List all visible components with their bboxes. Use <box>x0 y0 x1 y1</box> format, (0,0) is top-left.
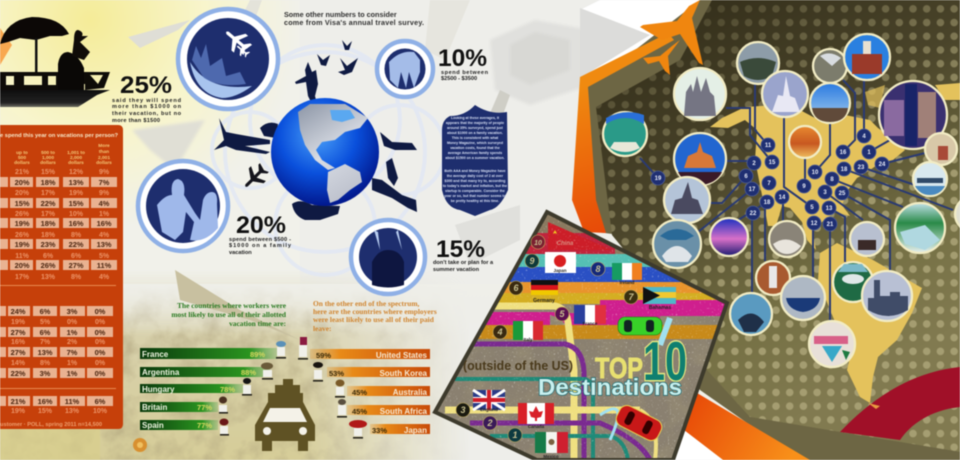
flag: japan: Japan <box>553 268 567 273</box>
table rows bottom: 19% <box>11 408 26 415</box>
table rows upper: 8% <box>71 274 82 281</box>
flag: united kingdom <box>473 390 505 412</box>
bar chart: least vacation used: Australia <box>393 388 428 397</box>
column headers: dollars <box>40 160 56 166</box>
photo: beige arch <box>925 133 957 165</box>
number badges: 12 <box>811 221 818 227</box>
rank numbers: 8 <box>595 264 601 274</box>
rank numbers: 6 <box>513 283 519 293</box>
stat: 25%: more than $1500 <box>112 118 160 124</box>
stat: 15% <box>433 236 494 273</box>
table rows lower: 13% <box>38 348 53 357</box>
map: north and south america <box>710 83 960 409</box>
number badges <box>651 129 889 231</box>
silhouettes around globe <box>214 62 417 220</box>
stat: 20%: $1000 on a family <box>229 243 292 249</box>
table rows lower: 27% <box>11 348 26 357</box>
rank numbers: 10 <box>534 240 542 247</box>
stat: 20%: spend between $500 - <box>229 237 291 243</box>
table rows upper: 17% <box>41 211 56 218</box>
photo: harbour <box>810 83 850 123</box>
shield text panel: about $1500 on a summer vacation. <box>445 156 505 160</box>
table rows lower: 3% <box>67 307 78 316</box>
table rows lower: 24% <box>11 307 26 316</box>
table rows lower: 22% <box>11 369 26 378</box>
flag: mexico <box>535 432 568 459</box>
table rows upper: 9% <box>99 169 110 176</box>
table rows lower: 8% <box>40 360 51 367</box>
photo: white ship <box>913 162 947 196</box>
birds <box>317 40 358 75</box>
photo: purple bridge <box>710 218 748 256</box>
compass decoration on map <box>133 438 147 452</box>
table rows lower: 0% <box>95 307 106 316</box>
stat: 25%: their vacation, but no <box>112 111 182 117</box>
shield text panel: vacation costs, found that the <box>450 146 500 150</box>
table source note: ustomer · POLL, spring 2011 n=14,500 <box>0 422 102 428</box>
column headers: 2,001 <box>98 155 110 161</box>
table rows upper: 6% <box>43 253 54 260</box>
table rows upper: 26% <box>15 232 30 239</box>
number badges: 11 <box>765 143 772 149</box>
photo: blue fountain <box>653 220 701 268</box>
bar chart: least vacation used <box>310 349 430 435</box>
table rows lower: 19% <box>11 319 26 326</box>
photo: cropped edge <box>955 196 960 232</box>
rank numbers <box>456 235 638 442</box>
bar chart: least vacation used: Japan <box>404 426 427 435</box>
photo: temple <box>674 68 726 120</box>
flag: italy <box>513 321 543 342</box>
stat: 15%: 15% <box>436 236 485 263</box>
flag: germany: Germany <box>533 298 555 304</box>
table rows upper: 17% <box>41 190 56 197</box>
light row cells <box>0 177 117 406</box>
table rows upper: 1% <box>99 211 110 218</box>
red arc <box>840 367 960 440</box>
stat: 20% <box>229 212 292 256</box>
table rows upper: 13% <box>69 178 84 187</box>
shield text panel: the average daily cost of 2 at over <box>447 174 504 178</box>
table rows upper: 16% <box>97 219 112 228</box>
table rows upper: 23% <box>41 240 56 249</box>
orange route band <box>572 33 810 460</box>
column headers: 1,001 to <box>67 150 85 156</box>
number badges: 1 <box>867 150 871 156</box>
heading: least likely countries: On the other end of the spectrum, <box>313 299 420 308</box>
rank numbers: 4 <box>496 327 503 337</box>
table rows lower: 5% <box>40 319 51 326</box>
heading: least likely countries: here are the countries where employers <box>313 307 437 316</box>
table rows lower: 27% <box>11 328 26 337</box>
column headers: dollars <box>68 160 84 166</box>
table rows lower: 14% <box>11 360 26 367</box>
shield text panel: Money Magazine, which surveyed <box>447 141 503 145</box>
table title: e spend this year on vacations per person? <box>0 133 118 139</box>
shield text panel: average American family spends <box>448 151 502 155</box>
faint route rings <box>212 45 445 275</box>
table rows upper: 16% <box>69 219 84 228</box>
photo: orange palace <box>674 133 726 185</box>
illustration: globe with silhouettes <box>214 40 417 220</box>
table rows lower: 7% <box>67 348 78 357</box>
number badges: 7 <box>767 181 771 187</box>
flag: germany <box>531 280 558 304</box>
number badges: 17 <box>749 187 756 193</box>
table rows lower: 16% <box>11 339 26 346</box>
title: top 10 destinations: Destinations <box>538 374 682 400</box>
panel: spending table <box>0 125 123 429</box>
bar chart: least vacation used: 53% <box>329 369 344 378</box>
table rows bottom: 6% <box>95 397 106 406</box>
heading: least likely countries: were least likely to use all of their paid <box>313 315 435 324</box>
flag: china <box>553 230 574 247</box>
column headers: 500 <box>18 155 26 161</box>
flag: canada <box>518 403 554 429</box>
table rows upper: 13% <box>41 274 56 281</box>
table rows lower: 1% <box>67 369 78 378</box>
table rows lower: 1% <box>67 360 78 367</box>
rank numbers: 7 <box>628 292 634 302</box>
number badges: 25 <box>839 191 846 197</box>
photo: canyon <box>756 261 790 295</box>
rank numbers: 5 <box>559 309 565 319</box>
background <box>0 0 464 460</box>
table rows bottom: 10% <box>93 408 108 415</box>
heading: most likely countries: most likely to use all of their allotted <box>171 310 287 319</box>
bar chart: most vacation used: 78% <box>220 385 235 394</box>
column headers: dollars <box>96 160 112 166</box>
shield text panel <box>442 105 508 216</box>
icon: green car <box>618 317 662 335</box>
table rows upper: 26% <box>41 261 56 270</box>
flag: bahamas: Bahamas <box>649 305 671 311</box>
bar chart: least vacation used: 59% <box>316 351 331 360</box>
number badges: 15 <box>769 160 776 166</box>
intro text: Some other numbers to consider <box>284 10 397 19</box>
shield text panel: Both AAA and Money Magazine have <box>444 169 506 173</box>
table rows lower: 2% <box>67 339 78 346</box>
stat: 15%: summer vacation <box>433 267 480 273</box>
number badges: 14 <box>779 195 786 201</box>
icon: taxi <box>255 379 315 451</box>
table rows upper: 19% <box>69 190 84 197</box>
flag: china: China <box>557 241 574 247</box>
flag: ireland: Ireland <box>620 280 635 285</box>
table rows upper: 19% <box>15 240 30 249</box>
table rows lower: 0% <box>95 328 106 337</box>
flag: france: France <box>583 321 598 326</box>
table rows upper: 8% <box>71 232 82 239</box>
table rows lower: 0% <box>95 360 106 367</box>
stat: 10%: 10% <box>438 45 487 72</box>
number badges: 18 <box>841 167 848 173</box>
bar chart: least vacation used: 45% <box>352 407 367 416</box>
flag: japan <box>545 252 576 273</box>
table rows upper: 20% <box>15 261 30 270</box>
bar chart: least vacation used: South Africa <box>380 407 428 416</box>
bar chart: most vacation used: 88% <box>241 368 256 377</box>
icon: black plane <box>238 160 272 194</box>
card subtitle: (outside of the US) <box>463 358 573 373</box>
photo: tropical pool <box>603 112 647 156</box>
stat: 10%: $2500 - $3500 <box>441 76 477 82</box>
bar chart: most vacation used: Spain <box>142 421 164 430</box>
stat: 10%: spend between <box>441 70 489 76</box>
number badges: 21 <box>827 222 834 228</box>
table rows upper: 20% <box>15 190 30 197</box>
table rows lower: 6% <box>40 328 51 337</box>
stat: 25%: said they will spend <box>112 98 182 104</box>
flag: canada: Canada <box>528 424 545 429</box>
number badges: 4 <box>862 134 866 140</box>
flag: bahamas <box>643 287 676 311</box>
table rows bottom <box>11 397 108 415</box>
number badges: 24 <box>879 162 886 168</box>
stat: 20%: vacation <box>229 250 252 256</box>
circle: 15% silhouette <box>351 220 425 294</box>
shield text panel: year or so, but that number seems to <box>444 194 506 198</box>
bar chart: most vacation used: Argentina <box>142 368 180 377</box>
bar chart: most vacation used: Hungary <box>142 385 175 394</box>
photo: skyline <box>862 271 912 321</box>
stat: 25% <box>112 72 182 124</box>
rank numbers: 1 <box>512 430 518 440</box>
shield text panel: around 35% surveyed, spend just <box>447 126 504 130</box>
number badges: 5 <box>810 205 814 211</box>
shield text panel: This is consistent with what <box>452 136 499 140</box>
title: top 10 destinations <box>538 330 687 400</box>
bar chart: most vacation used: Britain <box>142 403 167 412</box>
photo: grey waterfall <box>769 221 805 257</box>
flag: france <box>574 305 606 326</box>
photo: green falls <box>895 203 945 253</box>
table rows upper: 27% <box>69 261 84 270</box>
photo: white castle <box>762 71 808 117</box>
photo: grey street <box>813 49 847 83</box>
number badges: 22 <box>750 211 757 217</box>
table rows upper: 15% <box>15 199 30 208</box>
stat: 25%: 25% <box>120 72 172 99</box>
photo: green stadium <box>833 262 873 302</box>
number badges: 8 <box>830 177 834 183</box>
heading: least likely countries: leave: <box>313 324 331 333</box>
column headers: 1,000 <box>42 155 54 161</box>
photo: dusk fortress <box>850 222 884 256</box>
table rows upper: 4% <box>99 232 110 239</box>
table rows bottom: 21% <box>11 397 26 406</box>
table rows upper: 7% <box>99 178 110 187</box>
shield text panel: startup is comparable. Consider the <box>445 189 505 193</box>
stat: 15%: don't take or plan for a <box>433 260 494 266</box>
stat: 10% <box>438 45 489 82</box>
table rows upper: 4% <box>99 274 110 281</box>
title: top 10 destinations: TOP <box>595 353 643 385</box>
bar chart: most vacation used: 89% <box>250 350 265 359</box>
photo: pink carnival <box>809 321 855 367</box>
table rows lower: 7% <box>40 339 51 346</box>
column headers: dollars <box>14 160 30 166</box>
table rows lower: 6% <box>40 307 51 316</box>
number badges: 2 <box>752 161 756 167</box>
column headers: More <box>98 143 110 149</box>
table rows upper: 21% <box>15 169 30 176</box>
table rows upper: 22% <box>41 199 56 208</box>
table rows lower: 1% <box>67 328 78 337</box>
icon: orange plane <box>640 0 703 75</box>
flag: italy: Italy <box>523 337 533 342</box>
photo: fairy castle <box>664 177 710 223</box>
heading: most likely countries: vacation time are: <box>229 319 286 328</box>
route lines <box>640 80 953 320</box>
shield text panel: be pretty healthy at this time. <box>451 199 499 203</box>
table rows upper: 6% <box>71 253 82 260</box>
table rows upper: 13% <box>97 240 112 249</box>
number badges: 10 <box>812 170 819 176</box>
illustration: boat with umbrella silhouette <box>0 17 110 107</box>
bar chart: most vacation used: 77% <box>197 421 212 430</box>
photo: dolphins <box>730 293 772 335</box>
table rows upper: 18% <box>41 232 56 239</box>
table rows upper: 20% <box>15 178 30 187</box>
table rows upper: 22% <box>69 240 84 249</box>
table rows bottom: 16% <box>38 397 53 406</box>
table rows upper: 15% <box>41 169 56 176</box>
coloured road bands <box>444 215 725 459</box>
bar chart: most vacation used <box>140 348 277 430</box>
number badges: 19 <box>655 176 662 182</box>
bar chart: least vacation used: 45% <box>352 388 367 397</box>
table rows upper: 11% <box>15 253 30 260</box>
shield text panel: to today's market and inflation, but the <box>443 184 507 188</box>
table rows bottom: 15% <box>38 408 53 415</box>
column headers: 500 to <box>41 150 55 156</box>
column headers: up to <box>16 150 28 156</box>
panel: top 10 destinations card <box>430 205 730 460</box>
table rows lower: 0% <box>95 348 106 357</box>
table rows upper: 11% <box>97 261 112 270</box>
photo: red hall <box>844 34 890 80</box>
table rows upper: 12% <box>69 169 84 176</box>
table rows upper: 10% <box>69 211 84 218</box>
flag: mexico: Mexico <box>543 454 559 459</box>
intro text: come from Visa's annual travel survey. <box>284 18 424 27</box>
bar chart: most vacation used: 77% <box>197 403 212 412</box>
table rows bottom: 11% <box>65 397 80 406</box>
shield text panel: $300 and that many try to, according <box>445 179 505 183</box>
table rows upper: 18% <box>41 178 56 187</box>
column headers: than <box>99 149 109 155</box>
table rows lower: 0% <box>67 319 78 326</box>
circle: 10% group <box>377 41 433 97</box>
shield text panel: about $1000 on a family vacation. <box>447 131 503 135</box>
photo: blue grey harbour <box>781 276 825 320</box>
bar chart: most vacation used: France <box>142 350 169 359</box>
number badges: 6 <box>744 174 748 180</box>
stat: 25%: more than $1000 on <box>112 104 182 110</box>
shield text panel: appears that the majority of people <box>446 121 504 125</box>
rank numbers: 3 <box>460 405 466 415</box>
rank numbers: 2 <box>486 418 493 428</box>
stat: 20%: 20% <box>236 212 286 239</box>
flag: united kingdom: England <box>480 407 498 412</box>
panel: right dark map panel <box>587 0 960 460</box>
heading: most likely countries: The countries where workers were <box>177 301 287 310</box>
flag: ireland <box>612 263 642 285</box>
number badges: 3 <box>823 190 827 196</box>
table rows lower: 0% <box>95 319 106 326</box>
table rows lower: 0% <box>95 339 106 346</box>
icon: red car <box>614 403 664 443</box>
table rows lower: 3% <box>40 369 51 378</box>
rank numbers: 9 <box>529 256 535 266</box>
photo: sunset <box>789 126 821 158</box>
table rows lower: 0% <box>95 369 106 378</box>
bar chart: least vacation used: South Korea <box>379 369 428 378</box>
number badges: 23 <box>858 165 865 171</box>
table rows upper: 18% <box>41 219 56 228</box>
table rows upper: 9% <box>99 190 110 197</box>
number badges: 16 <box>840 150 847 156</box>
table rows upper: 4% <box>99 199 110 208</box>
table rows bottom: 13% <box>65 408 80 415</box>
title: top 10 destinations: 10 <box>643 330 687 392</box>
table rows upper: 17% <box>15 274 30 281</box>
table rows lower <box>11 307 106 378</box>
table rows upper: 5% <box>99 253 110 260</box>
table rows upper: 26% <box>15 211 30 218</box>
number badges: 13 <box>826 206 833 212</box>
photo: times square <box>879 81 947 149</box>
number badges: 9 <box>802 184 806 190</box>
circle: plane and foliage <box>178 9 278 109</box>
table rows upper: 15% <box>69 199 84 208</box>
number badges: 18 <box>764 200 771 206</box>
shield text panel: Looking at these averages, it <box>451 116 500 120</box>
bar chart: least vacation used: United States <box>376 351 428 360</box>
column headers: 2,000 <box>70 155 82 161</box>
landmark photo circles <box>603 34 960 367</box>
table rows upper <box>15 169 112 281</box>
photo: river valley <box>737 42 779 84</box>
icons: tourists at bar ends <box>219 337 367 439</box>
circle: 20% family <box>138 161 228 251</box>
table rows upper: 19% <box>15 219 30 228</box>
bar chart: least vacation used: 33% <box>372 426 387 435</box>
faded grey plane and road shapes <box>128 0 700 340</box>
